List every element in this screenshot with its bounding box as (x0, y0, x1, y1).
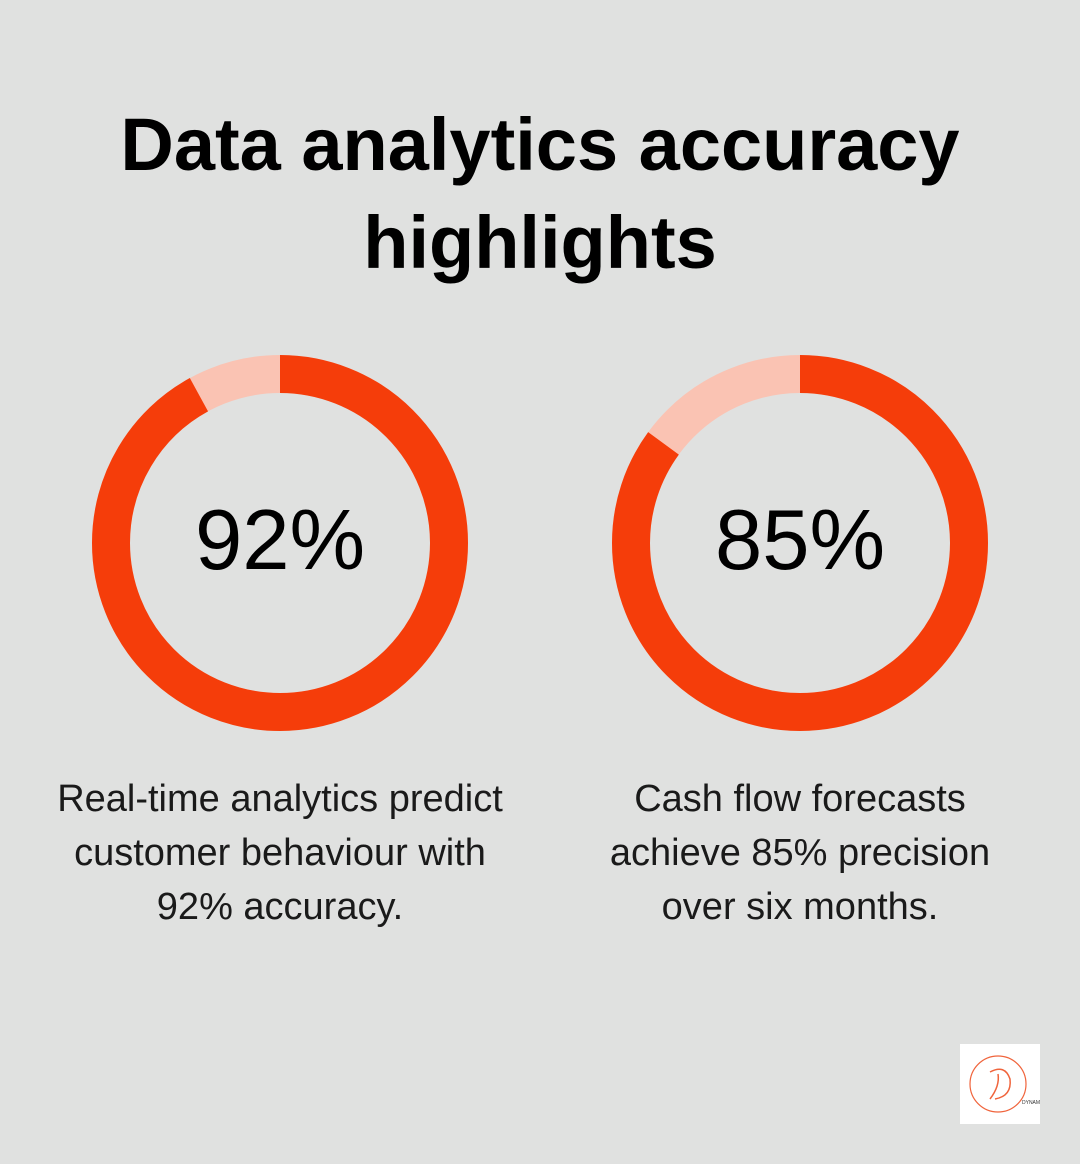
caption: 85%: over six months. (662, 886, 938, 928)
caption: 85%: achieve 85% precision (610, 832, 990, 874)
logo (960, 1044, 1040, 1124)
caption: 92%: Real-time analytics predict (57, 778, 503, 820)
donut: 85% (612, 355, 988, 731)
title (120, 103, 960, 284)
caption: 92%: 92% accuracy. (157, 886, 403, 928)
caption: 92% (57, 778, 503, 928)
donut: 85%: 85% (715, 493, 885, 588)
title: highlights (363, 201, 717, 284)
donut: 92%: 92% (195, 493, 365, 588)
donut: 92% (92, 355, 468, 731)
caption: 85%: Cash flow forecasts (634, 778, 966, 820)
title: Data analytics accuracy (120, 103, 960, 186)
caption: 85% (610, 778, 990, 928)
caption: 92%: customer behaviour with (74, 832, 486, 874)
